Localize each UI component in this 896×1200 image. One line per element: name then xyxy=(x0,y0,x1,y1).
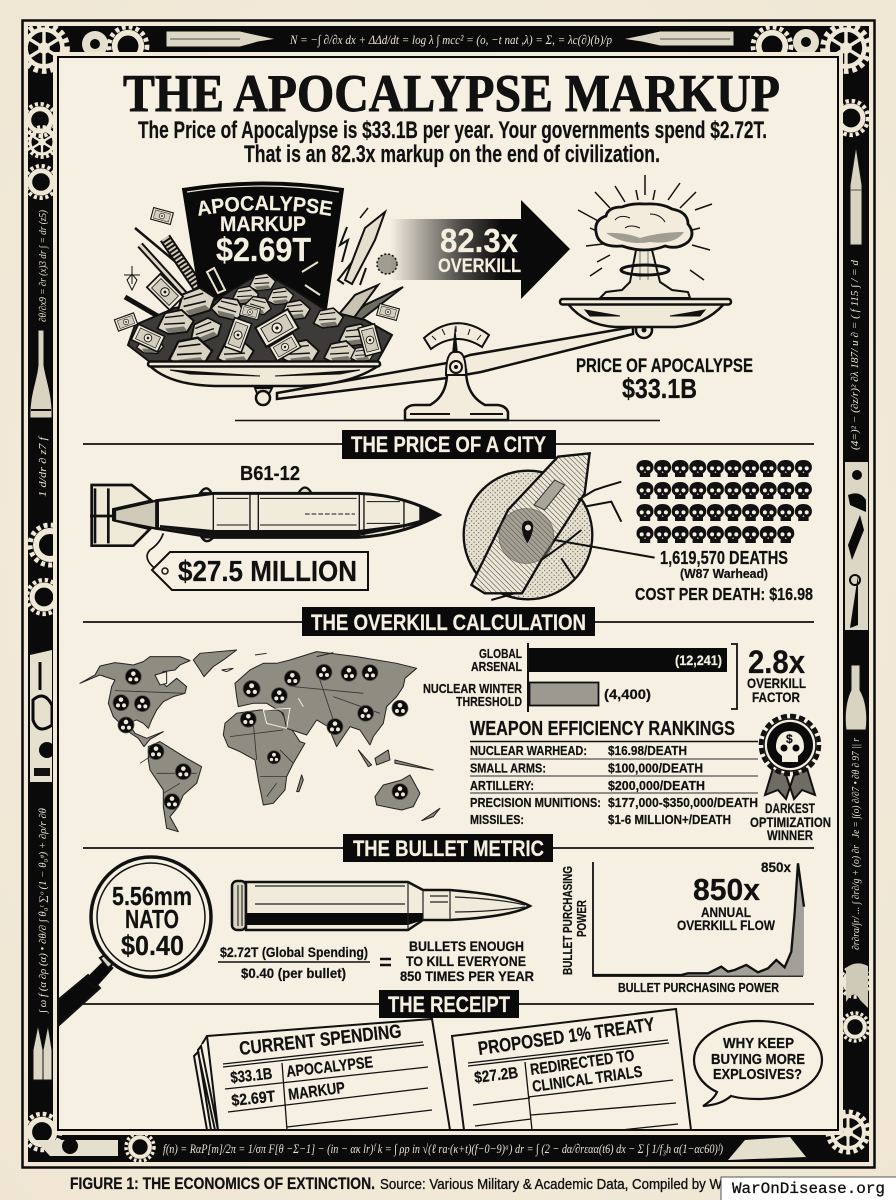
deaths text xyxy=(635,548,813,604)
line chart: bullet purchasing power: BULLET PURCHASING xyxy=(561,866,575,975)
price of apocalypse label: PRICE OF APOCALYPSE xyxy=(576,356,753,377)
row: nuclear warhead xyxy=(470,743,687,758)
nuclear markers xyxy=(113,664,408,810)
receipt: current spending: APOCALYPSE xyxy=(286,1054,374,1081)
section: the overkill calculation xyxy=(80,607,831,843)
deaths text: (W87 Warhead) xyxy=(680,567,768,581)
heading xyxy=(83,607,814,636)
line chart: bullet purchasing power: ANNUAL xyxy=(701,904,751,920)
city blast map xyxy=(464,453,655,600)
bar chart: arsenal vs threshold xyxy=(423,643,727,712)
top equation band: N = −∫ ∂/∂x dx + ΔΔd/dt = log λ ∫ mcc² = (o, −t nat ,λ) = Σ, = λc(∂)(b)/p xyxy=(289,32,612,48)
heading: THE OVERKILL CALCULATION xyxy=(311,610,586,635)
subtitle: That is an 82.3x markup on the end of civilization. xyxy=(244,141,660,168)
heading xyxy=(83,990,814,1018)
section: the bullet metric xyxy=(58,834,814,1026)
bullet equation: $2.72T (Global Spending) xyxy=(220,944,368,960)
section: the receipt xyxy=(83,990,822,1130)
magnifying glass with 5.56mm NATO $0.40 xyxy=(58,857,211,1026)
subtitle xyxy=(138,117,767,168)
B61-12 bomb: B61-12 xyxy=(240,463,300,485)
award rosette xyxy=(750,716,831,843)
deaths text: 1,619,570 DEATHS xyxy=(660,548,788,568)
speech bubble: BUYING MORE xyxy=(711,1052,805,1068)
title: THE APOCALYPSE MARKUP xyxy=(123,65,780,123)
overkill factor bracket: OVERKILL xyxy=(747,675,806,691)
bar chart: arsenal vs threshold: NUCLEAR WINTER xyxy=(423,681,523,696)
heading xyxy=(83,430,814,459)
weapon efficiency rankings table: WEAPON EFFICIENCY RANKINGS xyxy=(470,718,735,740)
rifle bullet xyxy=(232,881,530,930)
pile of money xyxy=(128,272,392,366)
floating banknotes xyxy=(114,208,399,331)
receipt: proposed 1% treaty: PROPOSED 1% TREATY xyxy=(477,1014,656,1060)
line chart: bullet purchasing power: BULLET PURCHASING POWER xyxy=(618,980,780,995)
skull pictogram grid xyxy=(636,460,812,543)
heading: THE PRICE OF A CITY xyxy=(351,432,546,457)
receipt: current spending: $33.1B xyxy=(230,1066,273,1087)
sign: Apocalypse Markup $2.69T: $2.69T xyxy=(216,231,311,268)
left pan dish xyxy=(148,362,380,386)
weapon efficiency rankings table xyxy=(470,718,758,827)
award rosette: $ xyxy=(786,732,793,746)
right band decoration: (4=)² − (∂z/r)² ∂λ 187/ u ∂ = ( f 115 ∫ / = d xyxy=(850,259,861,450)
magnifying glass with 5.56mm NATO $0.40: $0.40 xyxy=(121,930,184,961)
scale beam and stand xyxy=(235,322,660,420)
arrow: 82.3x overkill: 82.3x xyxy=(440,222,519,259)
price of apocalypse label xyxy=(576,356,753,404)
receipt: current spending: $2.69T xyxy=(231,1088,276,1110)
bar chart: arsenal vs threshold: GLOBAL xyxy=(479,646,522,661)
row: precision munitions: $177,000-$350,000/DEATH xyxy=(608,795,758,810)
figure caption: FIGURE 1: THE ECONOMICS OF EXTINCTION. xyxy=(70,1175,375,1193)
receipt: proposed 1% treaty: $27.2B xyxy=(473,1065,519,1087)
row: small arms xyxy=(470,760,703,776)
bullet equation: TO KILL EVERYONE xyxy=(406,953,526,969)
heading xyxy=(83,834,814,862)
row: small arms: $100,000/DEATH xyxy=(608,760,703,776)
right pan with mushroom cloud xyxy=(560,175,731,327)
magnifying glass with 5.56mm NATO $0.40: NATO xyxy=(125,904,179,934)
right band decoration: Je = ∫(o) ∂/∂7 • ∂θ ∂ 97 || r xyxy=(851,738,862,838)
figure caption xyxy=(70,1175,723,1193)
bar chart: arsenal vs threshold: (12,241) xyxy=(675,653,722,668)
bullet equation: 850 TIMES PER YEAR xyxy=(400,968,534,984)
sign: Apocalypse Markup $2.69T: APOCALYPSE xyxy=(198,196,332,216)
line chart: bullet purchasing power xyxy=(561,860,804,995)
mushroom cloud xyxy=(578,175,712,298)
row: nuclear warhead: NUCLEAR WARHEAD: xyxy=(470,743,587,758)
line chart: bullet purchasing power: 850x xyxy=(761,860,791,875)
bar chart: arsenal vs threshold: ARSENAL xyxy=(471,659,522,674)
sign: Apocalypse Markup $2.69T xyxy=(182,182,344,309)
watermark: WarOnDisease.org xyxy=(732,1180,885,1198)
bullet equation: $0.40 (per bullet) xyxy=(241,965,346,981)
row: missiles: $1-6 MILLION+/DEATH xyxy=(608,812,731,827)
line chart: bullet purchasing power: 850x xyxy=(693,872,761,907)
deaths text: COST PER DEATH: $16.98 xyxy=(635,584,813,604)
row: artillery: ARTILLERY: xyxy=(470,778,534,793)
speech bubble: WHY KEEP xyxy=(723,1036,794,1052)
world map xyxy=(80,650,440,832)
price of apocalypse label: $33.1B xyxy=(622,373,697,404)
B61-12 bomb xyxy=(90,463,439,570)
top equation band xyxy=(166,31,734,48)
magnifying glass with 5.56mm NATO $0.40: 5.56mm xyxy=(112,881,192,911)
right pan dish xyxy=(560,299,731,327)
left pan with money pile xyxy=(114,182,404,388)
bottom equation band: f(n) = RαP[m]/2π = 1/σπ F[θ −Σ−1] − (in − ακ lr)ᶠ k = ∫ ρp in √(ℓ ra·(κ+t)(f−0−9)ᵃ) dr = ∫ (2 − dα/∂rεαα(t6) dx − Σ ∫ 1/f₃h α(1−αc60)ᶠ) xyxy=(163,1141,723,1157)
left band decoration: ∫ ω f (α ∂ρ (α) • ∂θ/∂ ∫ θ₀ᵗ ∑ᵒ (1 − θ₀ᵠ) + ∂ρ/r ∂θ xyxy=(38,808,49,1014)
row: artillery xyxy=(470,778,705,793)
bullet equation xyxy=(218,938,534,984)
speech bubble: EXPLOSIVES? xyxy=(713,1067,802,1083)
receipt: proposed 1% treaty xyxy=(452,1009,691,1130)
overkill factor bracket: 2.8x xyxy=(748,644,805,680)
heading: THE BULLET METRIC xyxy=(353,836,544,861)
award rosette: OPTIMIZATION xyxy=(750,815,831,830)
receipt: current spending: MARKUP xyxy=(287,1080,346,1104)
bar chart: arsenal vs threshold: (4,400) xyxy=(604,687,651,702)
overkill factor bracket: FACTOR xyxy=(752,689,800,705)
sign: Apocalypse Markup $2.69T: MARKUP xyxy=(220,213,306,236)
right band decoration xyxy=(845,146,868,950)
price tag: $27.5 MILLION xyxy=(178,556,357,588)
arrow: 82.3x overkill: OVERKILL xyxy=(438,256,521,277)
right band decoration: ∂r∂ra/∫r/ ... ∫ ∂r∂/g + (o) ∂r xyxy=(851,845,862,950)
receipt: proposed 1% treaty: CLINICAL TRIALS xyxy=(531,1064,644,1096)
receipt: current spending xyxy=(194,1019,450,1130)
overkill factor bracket xyxy=(731,644,806,709)
line chart: bullet purchasing power: OVERKILL FLOW xyxy=(677,917,776,933)
arrow: 82.3x overkill xyxy=(390,200,570,299)
row: small arms: SMALL ARMS: xyxy=(470,760,546,776)
receipt: proposed 1% treaty: REDIRECTED TO xyxy=(529,1048,636,1079)
row: artillery: $200,000/DEATH xyxy=(608,778,705,793)
heading: THE RECEIPT xyxy=(388,992,510,1017)
bar chart: arsenal vs threshold: THRESHOLD xyxy=(456,694,522,709)
balance scale xyxy=(114,175,732,422)
bullet equation: BULLETS ENOUGH xyxy=(409,938,524,954)
left band decoration xyxy=(28,210,53,1014)
row: missiles: MISSILES: xyxy=(470,812,524,827)
award rosette: DARKEST xyxy=(765,801,816,816)
receipt: current spending: CURRENT SPENDING xyxy=(238,1021,403,1060)
row: missiles xyxy=(470,812,731,827)
speech bubble xyxy=(694,1021,822,1106)
watermark xyxy=(721,1177,896,1200)
award rosette: WINNER xyxy=(767,828,813,843)
row: precision munitions: PRECISION MUNITIONS: xyxy=(470,795,601,810)
section: the price of a city xyxy=(83,430,814,604)
left band decoration: 1 d/dr ∂ z7 f xyxy=(38,435,49,497)
row: nuclear warhead: $16.98/DEATH xyxy=(608,743,687,758)
weapons behind the pile xyxy=(124,208,403,332)
row: precision munitions xyxy=(470,795,758,810)
left band decoration: ∂θ/∂x9 = ∂r (x)3 dr ∫ = dr (z5) xyxy=(38,209,49,322)
figure caption: Source: Various Military & Academic Data, Compiled by W xyxy=(380,1176,723,1193)
line chart: bullet purchasing power: POWER xyxy=(575,900,589,937)
